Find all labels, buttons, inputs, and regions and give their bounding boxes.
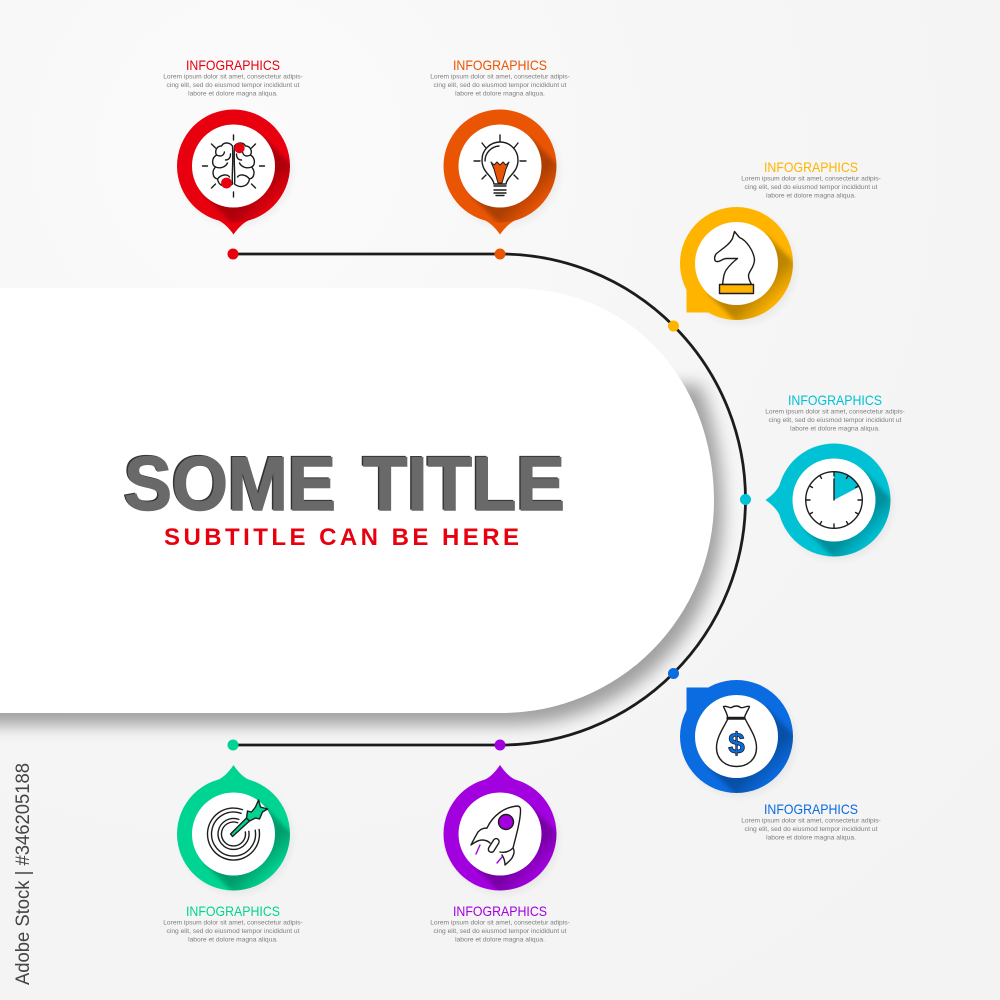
text: yellow description: Lorem ipsum dolor sit amet, consectetur adipis- [741, 176, 881, 182]
text: green description: labore et dolore magna aliqua. [188, 936, 278, 944]
icon: light bulb [474, 135, 526, 196]
title: SOME [122, 441, 334, 526]
text: green description [163, 920, 303, 944]
central white panel [0, 288, 714, 713]
text: red description: labore et dolore magna aliqua. [188, 90, 278, 98]
title [122, 441, 565, 527]
pin: red [177, 110, 291, 234]
step 6: purple rocket [430, 765, 570, 943]
step 1: red brain [164, 60, 302, 234]
text: teal description: cing elit, sed do eiusmod tempor incididunt ut [769, 417, 902, 424]
text: green heading: INFOGRAPHICS [186, 903, 280, 919]
text: orange description [430, 74, 570, 98]
text: red description: cing elit, sed do eiusmod tempor incididunt ut [167, 82, 300, 89]
text: teal description: Lorem ipsum dolor sit amet, consectetur adipis- [765, 408, 905, 416]
step 5: blue money bag [680, 680, 881, 842]
text: yellow description: cing elit, sed do eiusmod tempor incididunt ut [745, 184, 878, 191]
text: blue description: Lorem ipsum dolor sit amet, consectetur adipis- [741, 818, 881, 824]
text: blue description: cing elit, sed do eiusmod tempor incididunt ut [745, 826, 878, 833]
text: yellow heading: INFOGRAPHICS [764, 159, 858, 175]
icon: money bag [716, 706, 756, 766]
text: purple description: Lorem ipsum dolor sit amet, consectetur adipis- [430, 920, 570, 926]
text: green description: cing elit, sed do eiusmod tempor incididunt ut [167, 928, 300, 935]
icon: rocket [471, 806, 521, 865]
title: SOME [124, 442, 336, 527]
text: yellow description: labore et dolore magna aliqua. [766, 192, 856, 200]
panel shadow [0, 385, 723, 725]
text: teal description [765, 408, 905, 432]
text: red description [163, 74, 303, 98]
text: purple description: labore et dolore magna aliqua. [455, 936, 545, 944]
pin: orange [444, 110, 558, 234]
timeline curve [233, 254, 746, 745]
text: teal description: labore et dolore magna aliqua. [790, 426, 880, 432]
text: purple description: cing elit, sed do eiusmod tempor incididunt ut [434, 928, 567, 935]
step 7: green target [164, 765, 302, 943]
pin: green [177, 765, 291, 892]
text: purple description [430, 920, 570, 944]
step 3: yellow chess knight [680, 162, 880, 322]
timeline markers [228, 248, 751, 750]
text: teal heading: INFOGRAPHICS [788, 392, 882, 408]
text: blue description: labore et dolore magna aliqua. [766, 834, 856, 842]
text: blue description [741, 818, 881, 842]
step 4: teal clock [766, 396, 904, 558]
subtitle: SUBTITLE CAN BE HERE [164, 524, 519, 551]
title: TITLE [362, 441, 564, 526]
icon: brain [202, 135, 264, 197]
pin: yellow [680, 207, 794, 322]
text: orange description: Lorem ipsum dolor sit amet, consectetur adipis- [430, 74, 570, 80]
icon: dollar sign: $ [728, 728, 745, 760]
icon: target with arrow [207, 800, 268, 860]
pin: blue [680, 680, 794, 795]
title: TITLE [363, 442, 565, 527]
text: red heading: INFOGRAPHICS [186, 57, 280, 73]
text: blue heading: INFOGRAPHICS [764, 801, 858, 817]
text: green description: Lorem ipsum dolor sit amet, consectetur adipis- [163, 920, 303, 926]
text: purple heading: INFOGRAPHICS [453, 903, 547, 919]
pin: teal [766, 444, 892, 558]
text: orange description: cing elit, sed do eiusmod tempor incididunt ut [434, 82, 567, 89]
text: orange heading: INFOGRAPHICS [453, 57, 547, 73]
icon: clock [806, 472, 862, 528]
text: red description: Lorem ipsum dolor sit amet, consectetur adipis- [163, 74, 303, 80]
text: yellow description [741, 176, 881, 200]
stock id label: Adobe Stock | #346205188 [13, 763, 34, 985]
text: orange description: labore et dolore magna aliqua. [455, 90, 545, 98]
pin: purple [444, 765, 558, 892]
icon: chess knight [715, 232, 754, 294]
step 2: orange bulb [430, 60, 570, 234]
